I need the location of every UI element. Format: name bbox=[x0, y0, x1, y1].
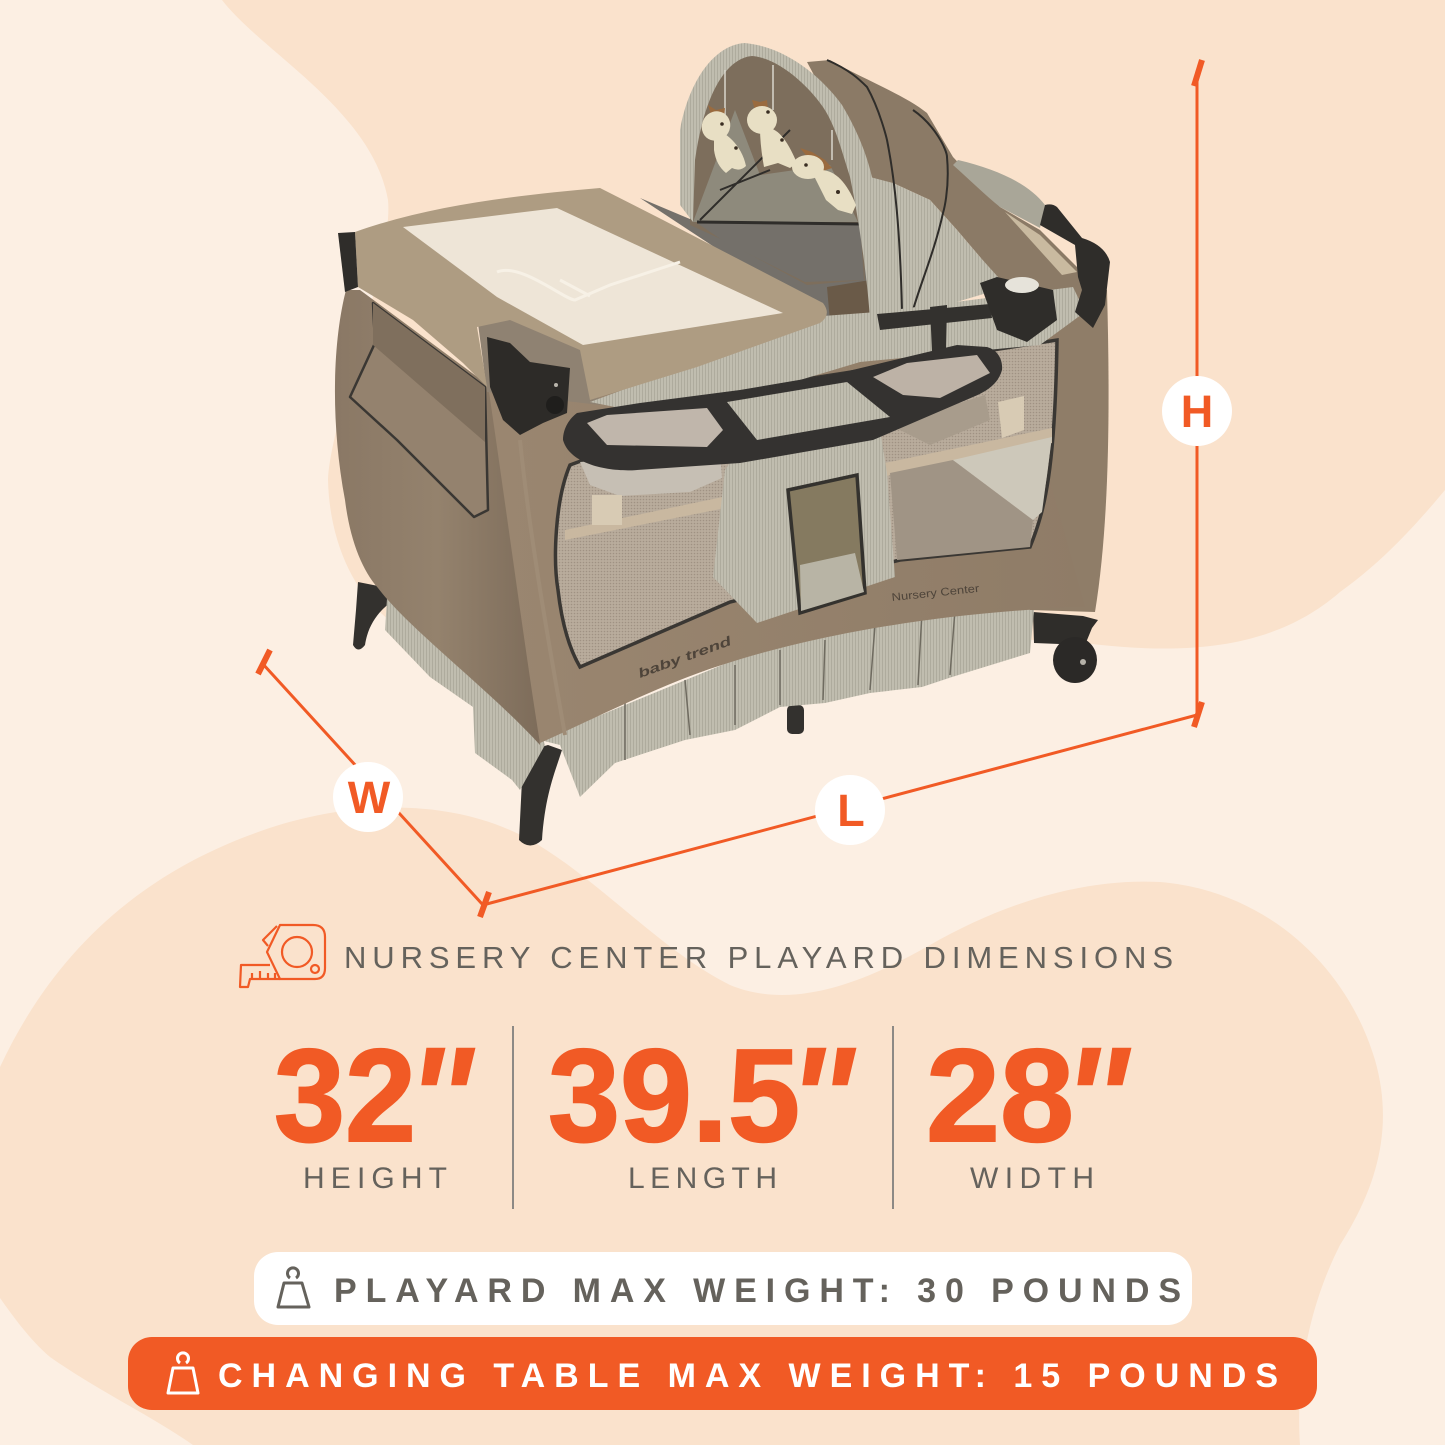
caddy inner base bbox=[800, 553, 864, 611]
right corner bracket bbox=[1040, 204, 1110, 328]
canopy brown hood bbox=[807, 60, 1085, 296]
changing table weight text: CHANGING TABLE MAX WEIGHT: 15 POUNDS bbox=[218, 1357, 1278, 1395]
stat: width: 28 bbox=[926, 1022, 1074, 1169]
brand mark: nursery center: Nursery Center bbox=[891, 583, 980, 604]
icon: weight bbox=[278, 1268, 309, 1307]
stat: width bbox=[926, 1015, 1132, 1195]
stat: length: " bbox=[787, 1015, 857, 1183]
front leg bbox=[519, 745, 562, 846]
background blob: top bbox=[222, 0, 1445, 649]
stat: height: " bbox=[406, 1015, 476, 1183]
stat: height bbox=[274, 1015, 476, 1195]
organizer basket right bbox=[890, 395, 990, 445]
canopy tan inner bbox=[1005, 212, 1077, 275]
canopy gray lower bbox=[870, 177, 1007, 320]
badge: L: L bbox=[837, 785, 865, 836]
changing pad bbox=[403, 208, 783, 345]
badge: W bbox=[333, 762, 403, 832]
stat: length: 39.5 bbox=[548, 1022, 800, 1169]
stat: length bbox=[548, 1015, 857, 1195]
left side panel bbox=[335, 290, 540, 745]
mesh window bbox=[556, 340, 1057, 667]
canopy wires bbox=[827, 60, 948, 310]
badge: H bbox=[1162, 376, 1232, 446]
interior dark net bbox=[697, 130, 864, 282]
changing table left bracket bbox=[338, 232, 358, 292]
pill: changing table max weight bbox=[128, 1337, 1317, 1410]
gray top rail bbox=[590, 287, 1085, 410]
stat: width: WIDTH bbox=[970, 1162, 1094, 1195]
top rail dark rod bbox=[877, 304, 992, 352]
canopy hoop bbox=[680, 43, 893, 320]
icon: weight bbox=[168, 1353, 198, 1393]
dimension line: length bbox=[483, 702, 1202, 905]
side pocket bbox=[350, 303, 488, 517]
toy giraffes bbox=[696, 65, 856, 214]
tray center compartment bbox=[727, 382, 890, 440]
stat: height: 32 bbox=[274, 1022, 416, 1169]
middle leg bbox=[787, 705, 804, 734]
front corner seam bbox=[520, 440, 565, 735]
interior floor behind table bbox=[640, 198, 885, 322]
gap fill behind changing table front bbox=[477, 316, 600, 405]
dimension line: width bbox=[258, 650, 489, 917]
organizer tray bbox=[563, 345, 1002, 470]
front panel bbox=[488, 330, 1085, 743]
divider bbox=[892, 1026, 894, 1209]
stat: width: " bbox=[1062, 1015, 1132, 1183]
wheel assembly bbox=[1033, 612, 1098, 683]
right cup bbox=[873, 355, 990, 398]
giraffe 2 bbox=[747, 100, 797, 168]
hanging caddy bbox=[713, 430, 895, 623]
music box bbox=[980, 277, 1057, 342]
heading: NURSERY CENTER PLAYARD DIMENSIONS bbox=[344, 940, 1173, 975]
changing table surround bbox=[355, 188, 827, 400]
back right body bbox=[1030, 285, 1109, 612]
straps bbox=[592, 396, 1024, 525]
stat: length: LENGTH bbox=[628, 1162, 777, 1195]
playard weight text: PLAYARD MAX WEIGHT: 30 POUNDS bbox=[334, 1272, 1181, 1310]
brand mark: baby trend: baby trend bbox=[636, 633, 735, 681]
icon: tape measure bbox=[240, 925, 325, 987]
giraffe 3 bbox=[792, 148, 856, 214]
badge: W: W bbox=[348, 772, 391, 823]
mattress strip bbox=[565, 428, 1052, 540]
badge: H: H bbox=[1181, 386, 1213, 437]
dimension line: height bbox=[1194, 60, 1202, 715]
giraffe 1 bbox=[696, 105, 746, 173]
back mesh bbox=[953, 437, 1052, 520]
interior tan floor bbox=[827, 280, 875, 322]
pill: playard max weight bbox=[254, 1252, 1192, 1325]
skirt bbox=[385, 583, 1035, 797]
left cup bbox=[587, 408, 723, 447]
caddy opening bbox=[788, 475, 865, 613]
back interior of canopy bbox=[690, 50, 865, 285]
organizer basket left bbox=[580, 452, 722, 496]
product illustration: playard bbox=[335, 43, 1110, 846]
changing table front bracket bbox=[487, 337, 570, 435]
stat: height: HEIGHT bbox=[303, 1162, 447, 1195]
badge: L bbox=[815, 775, 885, 845]
playard floor bbox=[890, 460, 1033, 560]
interior mesh bbox=[693, 110, 858, 222]
divider bbox=[512, 1026, 514, 1209]
back canopy rim bbox=[953, 160, 1045, 228]
back-left leg bbox=[353, 582, 391, 650]
background blob: bottom bbox=[0, 808, 1383, 1445]
